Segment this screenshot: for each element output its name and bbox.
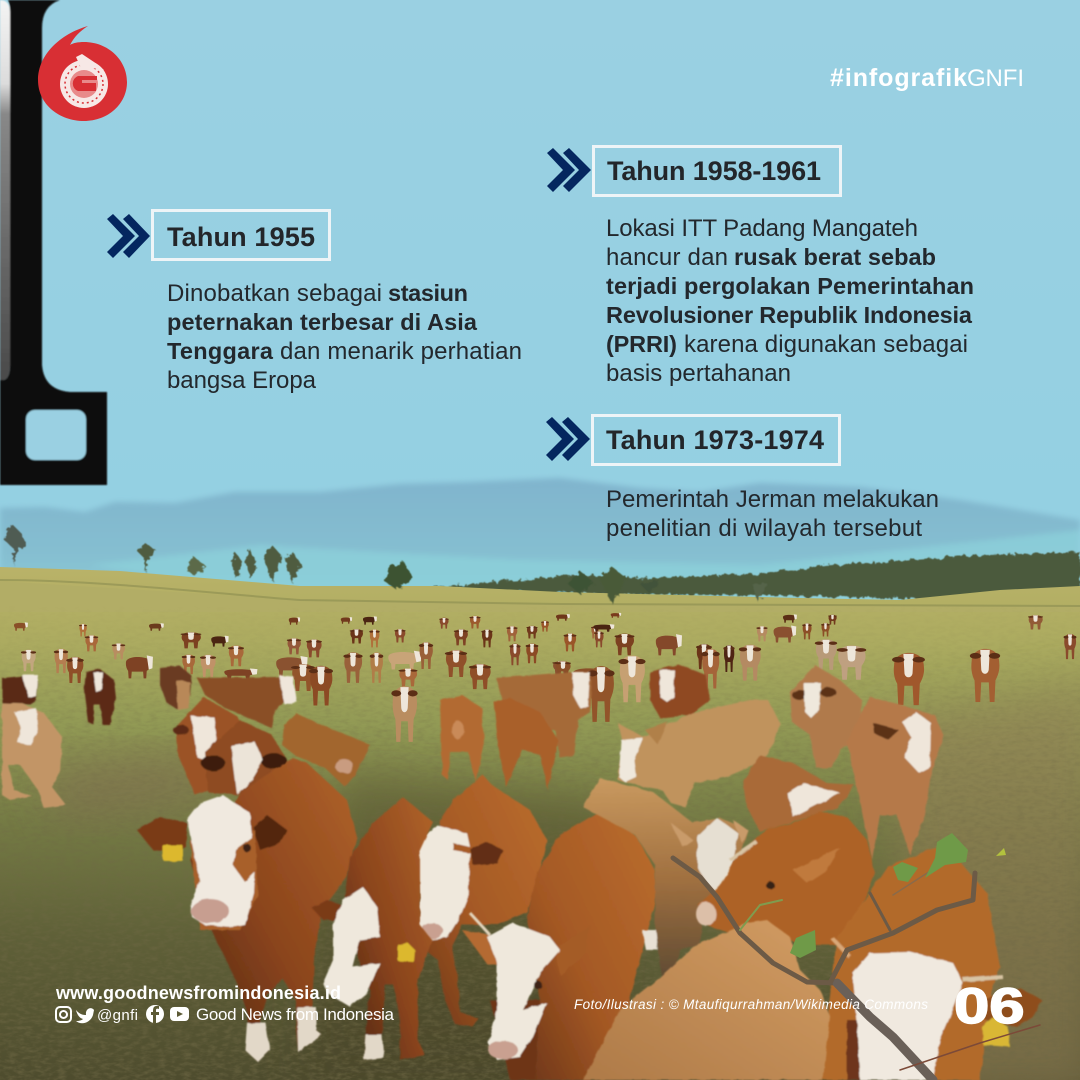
block: Tahun 1955 xyxy=(107,210,522,394)
mid herd of cattle xyxy=(2,664,943,860)
cow: dark left xyxy=(2,675,38,704)
body text: terjadi pergolakan Pemerintahan xyxy=(606,273,974,299)
hill ridge line xyxy=(0,581,1080,612)
body text: (PRRI) xyxy=(606,331,677,357)
body text: Tenggara xyxy=(167,338,274,364)
cow: large tan front-facing right xyxy=(847,697,943,860)
body text: karena digunakan sebagai xyxy=(684,331,968,358)
body text: Dinobatkan sebagai xyxy=(167,280,382,307)
heading: Tahun 1958-1961 xyxy=(607,156,821,186)
grass field xyxy=(0,567,1080,1080)
chevron arrow xyxy=(107,214,150,258)
body text: Revolusioner Republik Indonesia xyxy=(606,302,973,328)
footer social handles: @gnfi xyxy=(97,1007,138,1024)
distant tree line xyxy=(420,552,1080,600)
body text: dan menarik perhatian xyxy=(280,338,522,365)
far herd of small cattle xyxy=(14,613,1076,742)
mountain range xyxy=(0,478,1080,600)
cow: dark ears white face xyxy=(201,720,288,795)
cow: white face facing camera xyxy=(173,697,246,795)
cow: left edge tan xyxy=(2,702,66,808)
footer website: www.goodnewsfromindonesia.id xyxy=(55,983,341,1003)
front cow: brown facing left xyxy=(696,812,875,945)
cow: tan side-on xyxy=(618,700,780,807)
front cow: tan behind xyxy=(583,778,748,980)
front cow: brown with white blaze xyxy=(462,812,657,1080)
trees on horizon xyxy=(4,524,768,604)
chevron arrow xyxy=(546,417,590,461)
chevron arrow xyxy=(547,148,591,192)
body text: basis pertahanan xyxy=(606,360,791,387)
body text: penelitian di wilayah tersebut xyxy=(606,515,922,542)
ear tag xyxy=(163,845,183,861)
cow: large side-on xyxy=(197,675,297,728)
front cow: bottom right with white face xyxy=(820,845,1042,1080)
hashtag: GNFI xyxy=(967,65,1024,92)
front cow: tan back foreground xyxy=(583,920,830,1080)
body text xyxy=(606,486,939,542)
heading box xyxy=(594,146,840,196)
head xyxy=(190,830,258,930)
body text: rusak berat sebab xyxy=(734,244,936,270)
cow: tan-brown with horns xyxy=(282,713,370,787)
body text: hancur dan xyxy=(606,244,728,271)
icon: twitter xyxy=(76,1008,94,1023)
body text: Lokasi ITT Padang Mangateh xyxy=(606,215,918,242)
body text: bangsa Eropa xyxy=(167,367,317,394)
footer social handles xyxy=(56,1005,395,1024)
front cow: centre right xyxy=(382,775,547,1026)
cow: small front-facing brown xyxy=(440,695,484,782)
cow: brown with white face centre xyxy=(496,672,592,758)
cow: brown with calf xyxy=(160,666,192,710)
background sky xyxy=(0,0,1080,600)
heading box xyxy=(592,416,840,464)
icon: instagram xyxy=(56,1007,71,1022)
front cow: centre left xyxy=(312,797,433,1060)
cow: tan-brown centre right xyxy=(790,665,862,768)
cow: brown front-facing xyxy=(494,698,558,790)
icon: facebook xyxy=(146,1005,164,1023)
film strip frame xyxy=(0,0,107,485)
cow: brown with white blaze xyxy=(743,755,855,832)
footer social handles: Good News from Indonesia xyxy=(196,1005,395,1024)
body text: stasiun xyxy=(388,280,468,306)
block: Tahun 1973-1974 xyxy=(546,416,939,542)
leaves on branch xyxy=(790,833,1006,958)
body text xyxy=(167,280,522,394)
foreground branches xyxy=(673,858,1040,1080)
body text xyxy=(606,215,974,387)
heading: Tahun 1973-1974 xyxy=(606,425,824,455)
page number: 06 xyxy=(954,978,1025,1034)
logo xyxy=(38,26,127,121)
heading: Tahun 1955 xyxy=(167,222,315,252)
heading box xyxy=(152,210,330,260)
cow: front with white face xyxy=(650,664,710,718)
body text: peternakan terbesar di Asia xyxy=(167,309,478,335)
ears xyxy=(137,817,187,853)
block: Tahun 1958-1961 xyxy=(547,146,974,387)
cow: dark front-facing xyxy=(84,669,116,725)
photo credit: Foto/Ilustrasi : © Mtaufiqurrahman/Wikimedia Commons xyxy=(574,997,928,1012)
hashtag: #infografik xyxy=(830,64,967,92)
front cow: far left xyxy=(137,758,357,1062)
film sprocket hole xyxy=(26,410,86,460)
icon: youtube xyxy=(170,1007,189,1021)
body text: Pemerintah Jerman melakukan xyxy=(606,486,939,513)
